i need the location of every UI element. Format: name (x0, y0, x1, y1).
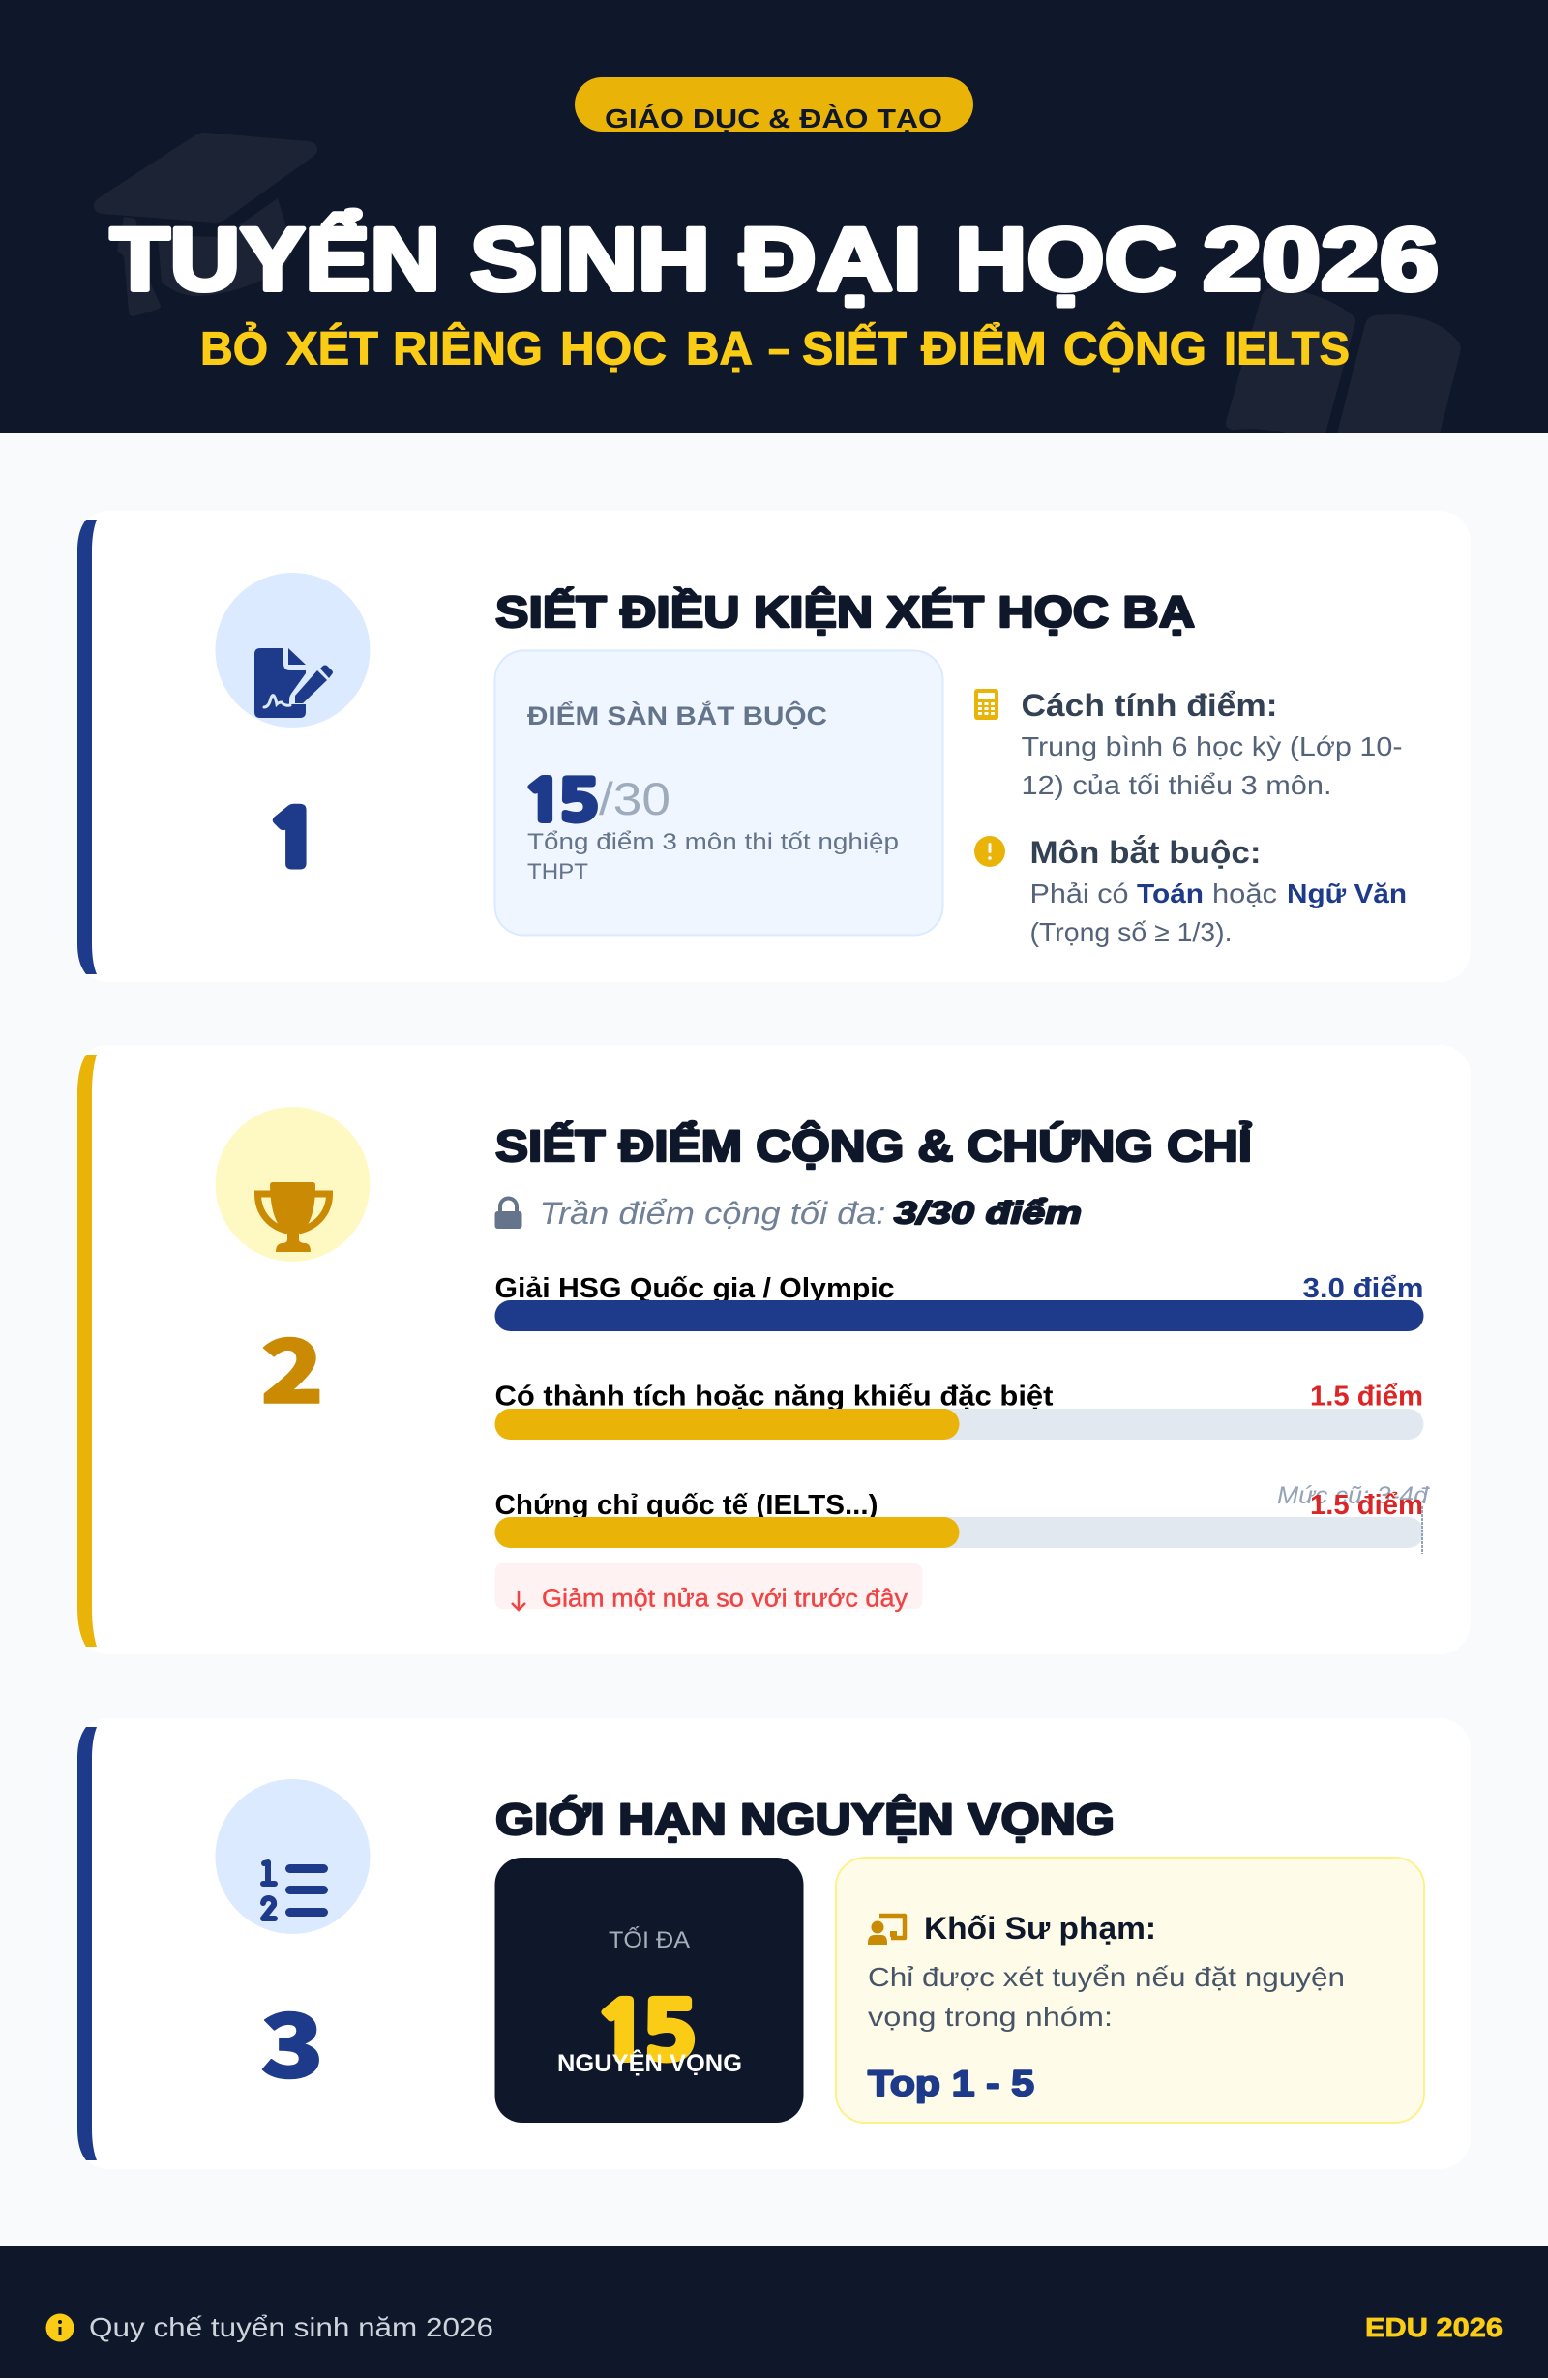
text block: required subject: Phải có (1029, 878, 1128, 908)
bar row: national olympiad: 3.0 điểm (1302, 1273, 1424, 1304)
text block: how scores are calculated: Cách tính điểm: (1022, 688, 1277, 723)
subtitle: IELTS (1224, 323, 1350, 375)
bar row: special achievement: 1.5 điểm (1310, 1382, 1423, 1413)
heading: SIẾT ĐIỂM CỘNG & CHỨNG CHỈ (495, 1121, 1252, 1171)
category pill (575, 77, 973, 134)
icon: down arrow (512, 1591, 525, 1610)
callout: pedagogy group: Chỉ được xét tuyển nếu đặt nguyện (868, 1962, 1345, 1992)
title (110, 209, 1439, 310)
bonus cap note: Trần điểm cộng tối đa: (540, 1196, 886, 1231)
callout: minimum score: ĐIỂM SÀN BẮT BUỘC (527, 700, 827, 730)
icon: exclamation (974, 836, 1005, 867)
title: ĐẠI (740, 211, 922, 310)
callout: reduction note: Giảm một nửa so với trước đây (542, 1583, 908, 1612)
text block: required subject: Toán (1137, 878, 1204, 908)
callout: minimum score: /30 (599, 773, 670, 824)
panel: section 2 bonus points (77, 1045, 1471, 1654)
header banner (0, 0, 1548, 433)
step number 2: 2 (260, 1301, 324, 1429)
title: SINH (470, 211, 710, 310)
panel: section 3 wish limit (77, 1718, 1471, 2169)
stat box: maximum wishes: 15 (595, 1993, 692, 2071)
decorative icon: books (1226, 288, 1461, 433)
callout: minimum score: THPT (527, 859, 588, 885)
decorative icon: graduation cap (94, 133, 317, 316)
text block: how scores are calculated (974, 688, 1403, 800)
callout: pedagogy group: Khối Sư phạm: (924, 1911, 1156, 1946)
bonus cap note: 3/30 điểm (894, 1196, 1082, 1231)
bar row: international certificate: Mức cũ: 3-4đ (1277, 1482, 1430, 1509)
subtitle: BỎ (200, 321, 268, 375)
subtitle: BẠ (686, 323, 753, 375)
step number 3: 3 (260, 1976, 324, 2103)
subtitle: – (768, 323, 789, 375)
text block: required subject: Ngữ Văn (1287, 878, 1407, 908)
bar row: international certificate (495, 1482, 1430, 1554)
icon: info (46, 2314, 74, 2341)
bar row: special achievement: Có thành tích hoặc năng khiếu đặc biệt (495, 1382, 1054, 1413)
icon: calculator (974, 689, 998, 720)
bar row: international certificate: Chứng chỉ quốc tế (IELTS...) (495, 1490, 878, 1521)
callout: minimum score: Tổng điểm 3 môn thi tốt nghiệp (527, 829, 899, 855)
footer brand: EDU 2026 (1365, 2312, 1503, 2342)
title: HỌC (955, 211, 1176, 310)
icon: chalkboard teacher (868, 1916, 905, 1945)
text block: how scores are calculated: 12) của tối thiểu 3 môn. (1022, 770, 1331, 800)
step number 1: 1 (268, 803, 320, 877)
callout: pedagogy group (836, 1858, 1424, 2123)
bar row: national olympiad (495, 1273, 1424, 1331)
text block: required subject: hoặc (1212, 878, 1277, 908)
footer (0, 2246, 1548, 2378)
category pill: GIÁO DỤC & ĐÀO TẠO (605, 104, 942, 134)
subtitle: XÉT (286, 323, 378, 375)
callout: minimum score: 15 (523, 774, 595, 830)
subtitle: HỌC (560, 323, 667, 375)
stat box: maximum wishes (495, 1858, 803, 2123)
text block: required subject: Môn bắt buộc: (1029, 835, 1262, 870)
text block: required subject (974, 835, 1407, 947)
callout: reduction note (495, 1563, 923, 1612)
icon: file signature (215, 573, 370, 728)
title: 2026 (1203, 211, 1439, 310)
callout: minimum score (495, 650, 942, 935)
subtitle: ĐIỂM (921, 323, 1047, 375)
bar row: international certificate: 1.5 điểm (1310, 1490, 1423, 1521)
text block: how scores are calculated: Trung bình 6 học kỳ (Lớp 10- (1022, 731, 1403, 761)
title: TUYỂN (110, 209, 440, 310)
subtitle (200, 321, 1350, 375)
stat box: maximum wishes: NGUYỆN VỌNG (557, 2048, 742, 2077)
icon: trophy (215, 1107, 370, 1262)
heading: SIẾT ĐIỀU KIỆN XÉT HỌC BẠ (495, 587, 1195, 637)
panel: section 1 transcript conditions (77, 511, 1471, 982)
footer note: Quy chế tuyển sinh năm 2026 (89, 2312, 493, 2342)
callout: pedagogy group: Top 1 - 5 (868, 2064, 1034, 2103)
subtitle: CỘNG (1063, 321, 1206, 375)
icon: lock (495, 1198, 522, 1229)
stat box: maximum wishes: TỐI ĐA (609, 1926, 691, 1953)
bonus cap note (495, 1196, 1082, 1231)
callout: pedagogy group: vọng trong nhóm: (868, 2002, 1113, 2032)
icon: numbered list (215, 1779, 370, 1934)
subtitle: RIÊNG (393, 321, 543, 375)
bar row: special achievement (495, 1382, 1424, 1440)
bar row: national olympiad: Giải HSG Quốc gia / Olympic (495, 1273, 894, 1304)
heading: GIỚI HẠN NGUYỆN VỌNG (495, 1795, 1115, 1844)
subtitle: SIẾT (802, 323, 907, 375)
text block: required subject: (Trọng số ≥ 1/3). (1029, 917, 1233, 947)
bar chart: bonus points (495, 1273, 1430, 1554)
